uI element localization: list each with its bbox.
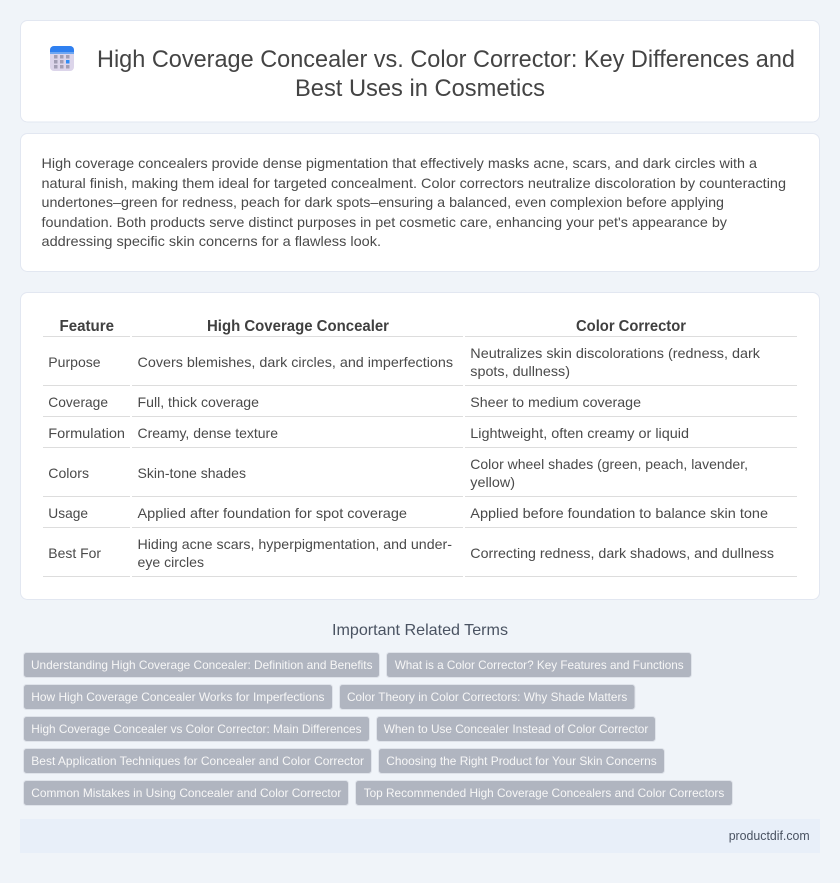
intro text block: natural finish, making them ideal for targeted concealment. Color correctors neutralize discoloration by counteracting — [42, 175, 786, 191]
chip row 2 — [24, 684, 635, 710]
row: coverage: Sheer to medium coverage — [470, 394, 641, 410]
row: usage: Applied after foundation for spot coverage — [138, 505, 407, 521]
table header row: Feature — [60, 318, 114, 335]
row: best for — [43, 536, 797, 577]
chip row 5: Common Mistakes in Using Concealer and Color Corrector — [31, 786, 341, 800]
row: purpose: Purpose — [48, 354, 101, 370]
header panel — [20, 20, 820, 122]
row: best for: Correcting redness, dark shadows, and dullness — [470, 545, 774, 561]
icon: calendar — [50, 46, 74, 71]
row: purpose: spots, dullness) — [470, 363, 570, 379]
chip row 5: Top Recommended High Coverage Concealers and Color Correctors — [364, 786, 724, 800]
footer bar — [20, 819, 820, 853]
row: purpose: Covers blemishes, dark circles, and imperfections — [138, 354, 453, 370]
related terms chips — [24, 652, 732, 806]
intro text block: addressing specific skin concerns for a flawless look. — [42, 233, 381, 249]
chip row 1: What is a Color Corrector? Key Features and Functions — [395, 658, 684, 672]
row: coverage: Coverage — [48, 394, 108, 410]
row: colors: yellow) — [470, 474, 515, 490]
row: colors: Skin-tone shades — [138, 465, 246, 481]
intro text block: foundation. Both products serve distinct purposes in pet cosmetic care, enhancing your pet's appearance by — [42, 214, 727, 230]
title: High Coverage Concealer vs. Color Corrector: Key Differences and — [97, 46, 795, 73]
panel: introduction — [20, 134, 820, 272]
row: coverage — [43, 394, 797, 417]
row: formulation: Formulation — [48, 425, 125, 441]
panel: comparison table — [20, 292, 820, 600]
intro text block: High coverage concealers provide dense pigmentation that effectively masks acne, scars, and dark circles with a — [42, 155, 757, 171]
row: usage: Usage — [48, 505, 88, 521]
row: usage — [43, 505, 797, 528]
title: Best Uses in Cosmetics — [295, 75, 545, 102]
row: purpose: Neutralizes skin discolorations (redness, dark — [470, 345, 761, 361]
intro text block — [42, 155, 786, 249]
chip row 4: Choosing the Right Product for Your Skin Concerns — [386, 754, 657, 768]
chip row 4 — [24, 748, 664, 774]
table header row: Color Corrector — [576, 318, 686, 335]
row: colors: Color wheel shades (green, peach, lavender, — [470, 456, 748, 472]
row: purpose — [43, 345, 797, 386]
row: usage: Applied before foundation to balance skin tone — [470, 505, 768, 521]
row: coverage: Full, thick coverage — [138, 394, 259, 410]
table header row — [43, 318, 797, 337]
intro text block: undertones–green for redness, peach for dark spots–ensuring a balanced, even complexion before applying — [42, 194, 724, 210]
row: colors — [43, 456, 797, 497]
footer source text: productdif.com — [729, 828, 810, 843]
title — [97, 46, 795, 102]
chip row 4: Best Application Techniques for Concealer and Color Corrector — [31, 754, 364, 768]
row: best for: Best For — [48, 545, 101, 561]
chip row 3 — [24, 716, 656, 742]
row: formulation — [43, 425, 797, 448]
row: formulation: Creamy, dense texture — [138, 425, 278, 441]
chip row 2: How High Coverage Concealer Works for Imperfections — [31, 690, 325, 704]
chip row 1: Understanding High Coverage Concealer: Definition and Benefits — [31, 658, 372, 672]
row: best for: Hiding acne scars, hyperpigmentation, and under- — [138, 536, 452, 552]
heading: important related terms: Important Related Terms — [332, 622, 508, 639]
chip row 3: High Coverage Concealer vs Color Corrector: Main Differences — [31, 722, 362, 736]
chip row 3: When to Use Concealer Instead of Color Corrector — [384, 722, 648, 736]
table header row: High Coverage Concealer — [207, 318, 389, 335]
row: colors: Colors — [48, 465, 89, 481]
row: best for: eye circles — [138, 554, 204, 570]
chip row 1 — [24, 652, 692, 678]
chip row 2: Color Theory in Color Correctors: Why Shade Matters — [347, 690, 627, 704]
chip row 5 — [24, 780, 732, 806]
row: formulation: Lightweight, often creamy or liquid — [470, 425, 689, 441]
